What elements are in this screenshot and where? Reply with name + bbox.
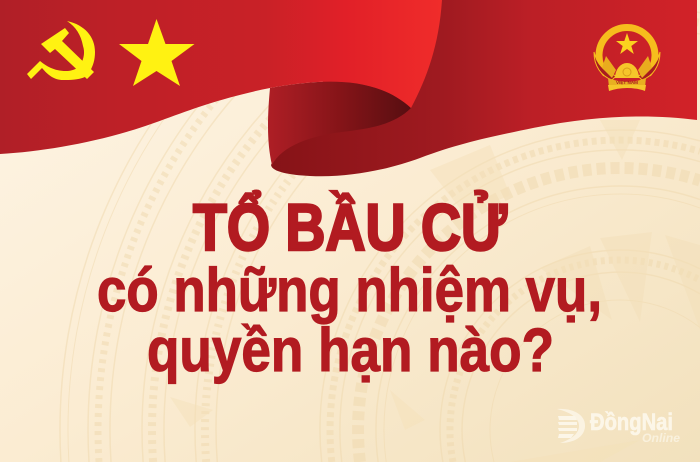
flag: right section and lower curl xyxy=(271,60,697,176)
icon: national emblem: VIỆT NAM xyxy=(616,78,638,85)
logo tagline: Online xyxy=(642,431,680,445)
title line 1: TỔ BẦU CỬ xyxy=(193,190,507,264)
icon: yellow star xyxy=(119,19,194,86)
flag: right top section xyxy=(415,0,697,80)
logo: Dong Nai Online xyxy=(557,409,680,445)
title line 2: có những nhiệm vụ, xyxy=(97,256,602,324)
logo icon xyxy=(557,409,585,443)
icon: hammer and sickle xyxy=(27,21,95,80)
logo wordmark: ĐồngNai xyxy=(590,409,673,436)
title line 3: quyền hạn nào? xyxy=(147,316,554,384)
icon: national emblem xyxy=(594,27,660,91)
flag: curl underside xyxy=(268,82,411,165)
background pattern: drum rays and birds xyxy=(170,120,700,462)
title xyxy=(97,190,602,384)
flag: left bright section xyxy=(0,0,442,154)
